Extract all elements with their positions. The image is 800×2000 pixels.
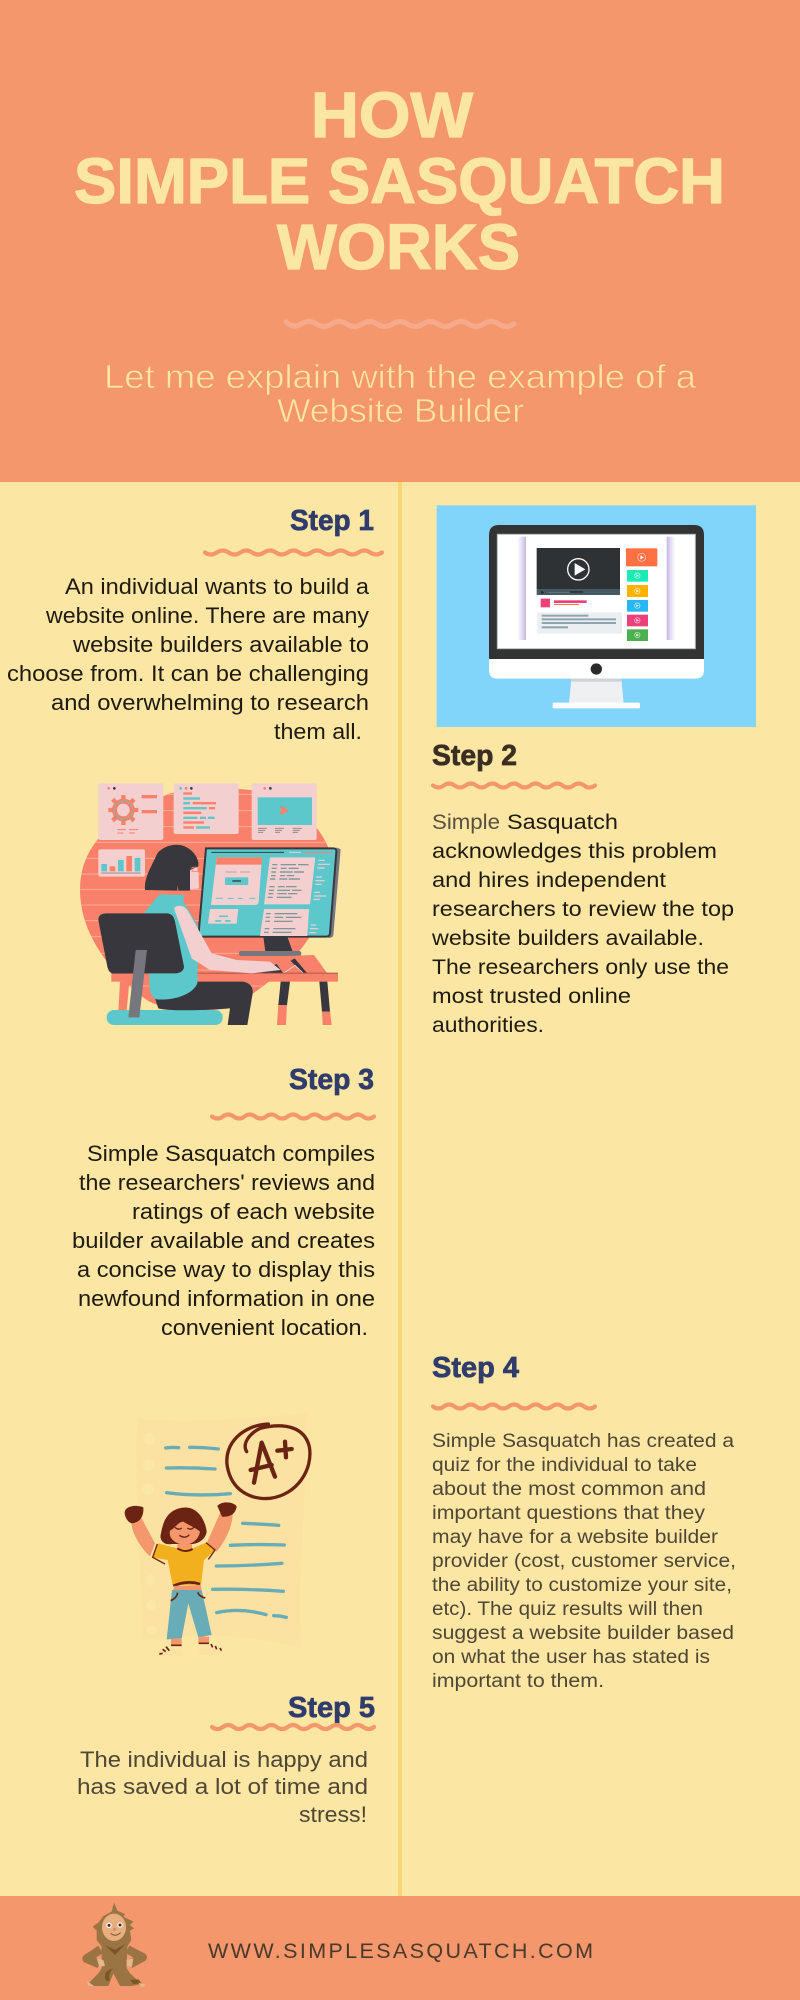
step 4 heading: Step 4: [432, 1352, 519, 1384]
step 2 heading: Step 2: [432, 740, 517, 772]
step 1 heading: Step 1: [290, 505, 374, 537]
step 5 text: stress!: [299, 1802, 367, 1827]
step 4 text: provider (cost, customer service,: [432, 1551, 736, 1572]
website url: WWW.SIMPLESASQUATCH.COM: [208, 1939, 593, 1963]
step 4 text: important to them.: [432, 1671, 604, 1692]
illustration: desktop monitor: [437, 505, 756, 727]
step 2 text: authorities.: [432, 1013, 544, 1037]
step 4 text: suggest a website builder based: [432, 1623, 734, 1644]
step 2 text: [431, 810, 734, 1037]
panel: footer: [0, 1896, 800, 2000]
step 2 text: The researchers only use the: [432, 955, 729, 979]
step 3 text: newfound information in one: [78, 1286, 375, 1311]
step 5 text: [77, 1747, 368, 1827]
step 2 text: acknowledges this problem: [432, 839, 717, 863]
step 2 text: Sasquatch: [507, 810, 618, 834]
panel: step 1: [7, 505, 382, 744]
panel: header: [0, 0, 800, 482]
step 4 text: on what the user has stated is: [432, 1647, 710, 1668]
step 4 text: Simple Sasquatch has created a: [432, 1431, 734, 1452]
step 1 text: them all.: [274, 719, 362, 744]
panel: step 4: [432, 1352, 736, 1692]
step 1 text: [7, 574, 370, 744]
title: [74, 79, 725, 283]
subtitle: Let me explain with the example of a: [104, 358, 697, 395]
step 4 text: quiz for the individual to take: [432, 1455, 697, 1476]
step 3 text: a concise way to display this: [77, 1257, 375, 1282]
step 4 text: may have for a website builder: [432, 1527, 719, 1548]
illustration: woman at computer: [70, 783, 341, 1025]
panel: step 3: [72, 1064, 375, 1340]
step 1 text: choose from. It can be challenging: [7, 661, 369, 686]
step 3 text: [72, 1141, 375, 1340]
panel: step 2: [431, 505, 756, 1037]
step 4 text: important questions that they: [432, 1503, 706, 1524]
step 3 text: convenient location.: [161, 1315, 368, 1340]
step 1 text: website online. There are many: [45, 603, 369, 628]
step 3 text: the researchers' reviews and: [79, 1170, 375, 1195]
title: WORKS: [277, 211, 520, 283]
step 2 text: Simple: [432, 810, 500, 834]
step 2 text: and hires independent: [432, 868, 666, 892]
step 3 text: ratings of each website: [132, 1199, 375, 1224]
title: HOW: [311, 79, 474, 151]
step 1 text: website builders available to: [72, 632, 369, 657]
step 2 text: researchers to review the top: [432, 897, 734, 921]
step 1 text: An individual wants to build a: [65, 574, 370, 599]
step 5 heading: Step 5: [288, 1692, 375, 1724]
step 5 text: has saved a lot of time and: [77, 1774, 368, 1799]
subtitle: [104, 358, 697, 429]
step 3 heading: Step 3: [289, 1064, 374, 1096]
step 5 text: The individual is happy and: [80, 1747, 368, 1772]
panel: step 5: [77, 1692, 375, 1827]
step 2 text: most trusted online: [432, 984, 631, 1008]
icon: sasquatch mascot: [87, 1903, 147, 1987]
step 3 text: Simple Sasquatch compiles: [87, 1141, 375, 1166]
title: SIMPLE SASQUATCH: [74, 145, 725, 217]
step 2 text: website builders available.: [431, 926, 704, 950]
step 4 text: [432, 1431, 736, 1692]
subtitle: Website Builder: [277, 392, 524, 429]
step 4 text: the ability to customize your site,: [432, 1575, 732, 1596]
illustration: happy student with A+ paper: [125, 1413, 310, 1657]
step 3 text: builder available and creates: [72, 1228, 375, 1253]
step 1 text: and overwhelming to research: [51, 690, 369, 715]
title wave divider: [286, 322, 514, 326]
step 4 text: about the most common and: [432, 1479, 706, 1500]
step 4 text: etc). The quiz results will then: [432, 1599, 703, 1620]
